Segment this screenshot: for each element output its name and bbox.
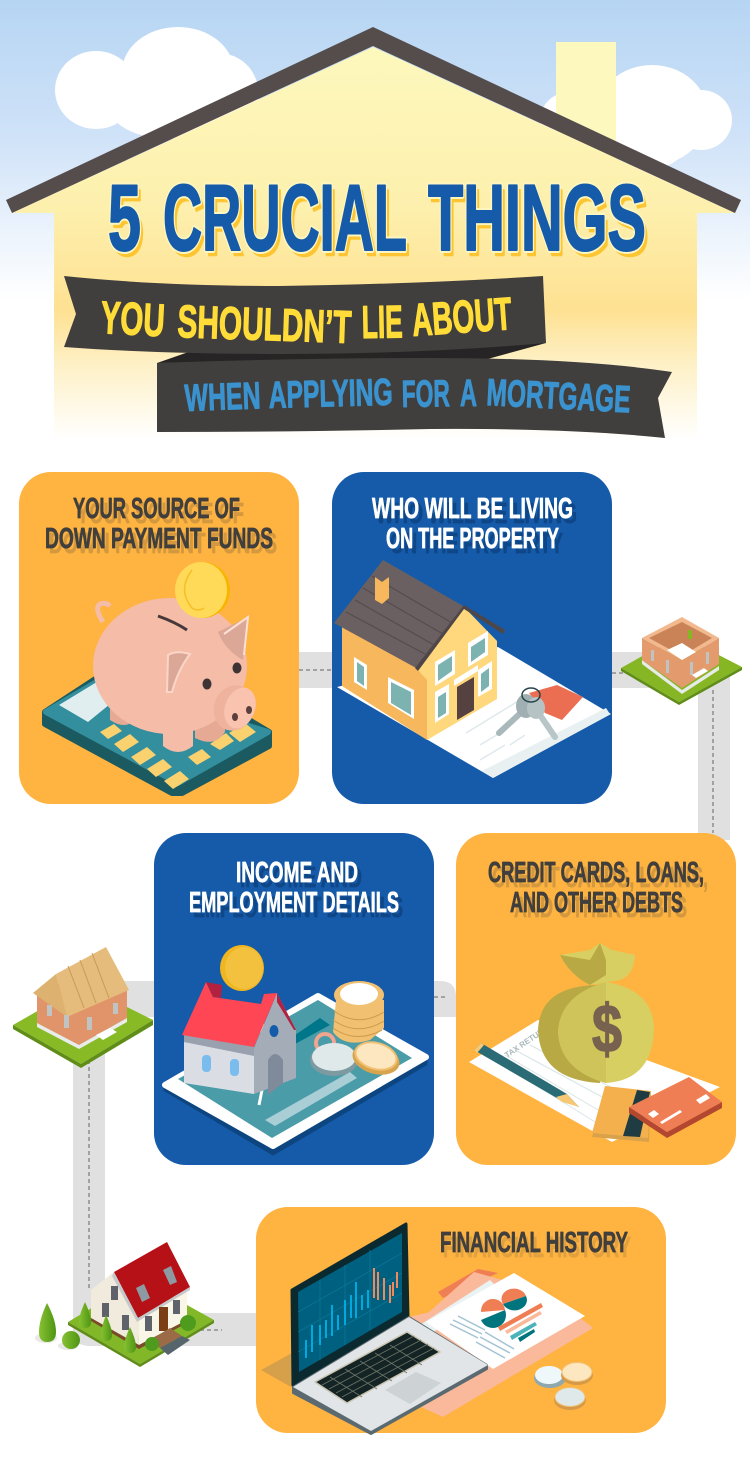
heading: who will be living on the property: WHO WILL BE LIVING [372,493,573,525]
heading: financial history: FINANCIAL HISTORY [440,1227,628,1259]
title: CRUCIAL [166,170,410,275]
sky background [0,0,750,300]
panel: who will be living on the property [332,472,612,804]
title: CRUCIAL [163,165,407,270]
icon: coins [220,945,403,1080]
roof [6,27,741,213]
heading: who will be living on the property [372,493,577,560]
ribbon: you shouldn't lie about: LIE [361,295,403,348]
heading: income and employment details: EMPLOYMENT DETAILS [193,892,403,924]
road path [73,652,730,1346]
ribbon: you shouldn't lie about: SHOULDN’T [177,295,352,353]
heading: credit cards, loans, and other debts [488,857,708,924]
ribbon: you shouldn't lie about [64,276,546,354]
icon: pen [474,1043,579,1107]
ribbon: when applying for a mortgage [157,358,672,438]
panel: financial history [256,1207,666,1434]
heading: your source of down payment funds [45,493,277,560]
icon: laptop [261,1224,488,1434]
icon: red roof house with garden [35,1242,214,1367]
icon: yellow house [334,560,505,740]
heading: income and employment details: INCOME AND [236,857,358,889]
icon: document under house [337,647,611,778]
panel: income and employment details [154,833,434,1165]
ribbon: you shouldn't lie about: ABOUT [410,287,513,346]
heading: your source of down payment funds: YOUR SOURCE OF [73,493,240,525]
icon: keys and tag [499,685,583,737]
cloud left [55,27,259,139]
icon: money bag [538,943,654,1083]
icon: calculator [45,676,269,793]
title: 5 [108,165,141,270]
heading: your source of down payment funds: YOUR SOURCE OF [77,498,244,530]
icon: folder with report [409,1269,593,1417]
ribbon: when applying for a mortgage: MORTGAGE [486,372,632,422]
ribbon: when applying for a mortgage: FOR [401,373,450,416]
heading: financial history: FINANCIAL HISTORY [443,1232,631,1264]
ribbon: when applying for a mortgage: WHEN [184,375,261,420]
title: CRUCIAL [163,165,407,270]
heading: financial history [440,1227,631,1264]
icon: tax return document [469,1020,720,1142]
ribbon connector [157,343,546,363]
panel: down payment funds [19,472,299,804]
icon: piggy bank [93,562,261,752]
heading: your source of down payment funds: DOWN PAYMENT FUNDS [49,528,277,560]
title: 5 [108,165,141,270]
icon: brick house under construction [621,617,742,705]
heading: who will be living on the property: WHO WILL BE LIVING [376,498,577,530]
heading: your source of down payment funds: DOWN PAYMENT FUNDS [45,523,273,555]
heading: who will be living on the property: ON THE PROPERTY [386,523,559,555]
panel: credit cards, loans, and other debts [456,833,736,1165]
house silhouette [12,42,735,440]
icon: tax return document: TAX RETURN [503,1024,551,1060]
icon: money bag: $ [592,991,622,1067]
ribbon: you shouldn't lie about: YOU [99,291,166,346]
cloud right [540,65,732,169]
ribbon: when applying for a mortgage: APPLYING [268,372,393,417]
heading: income and employment details: EMPLOYMENT DETAILS [189,887,399,919]
heading: who will be living on the property: ON THE PROPERTY [390,528,563,560]
icon: house with timber roof [13,947,153,1068]
heading: income and employment details [189,857,403,924]
icon: credit cards [592,1077,722,1142]
icon: red-roofed house [182,982,296,1095]
ribbon: when applying for a mortgage: A [460,373,477,415]
heading: income and employment details: INCOME AND [240,862,362,894]
icon: small coins [534,1362,593,1410]
icon: tablet [165,996,426,1154]
title: 5 [111,170,144,275]
